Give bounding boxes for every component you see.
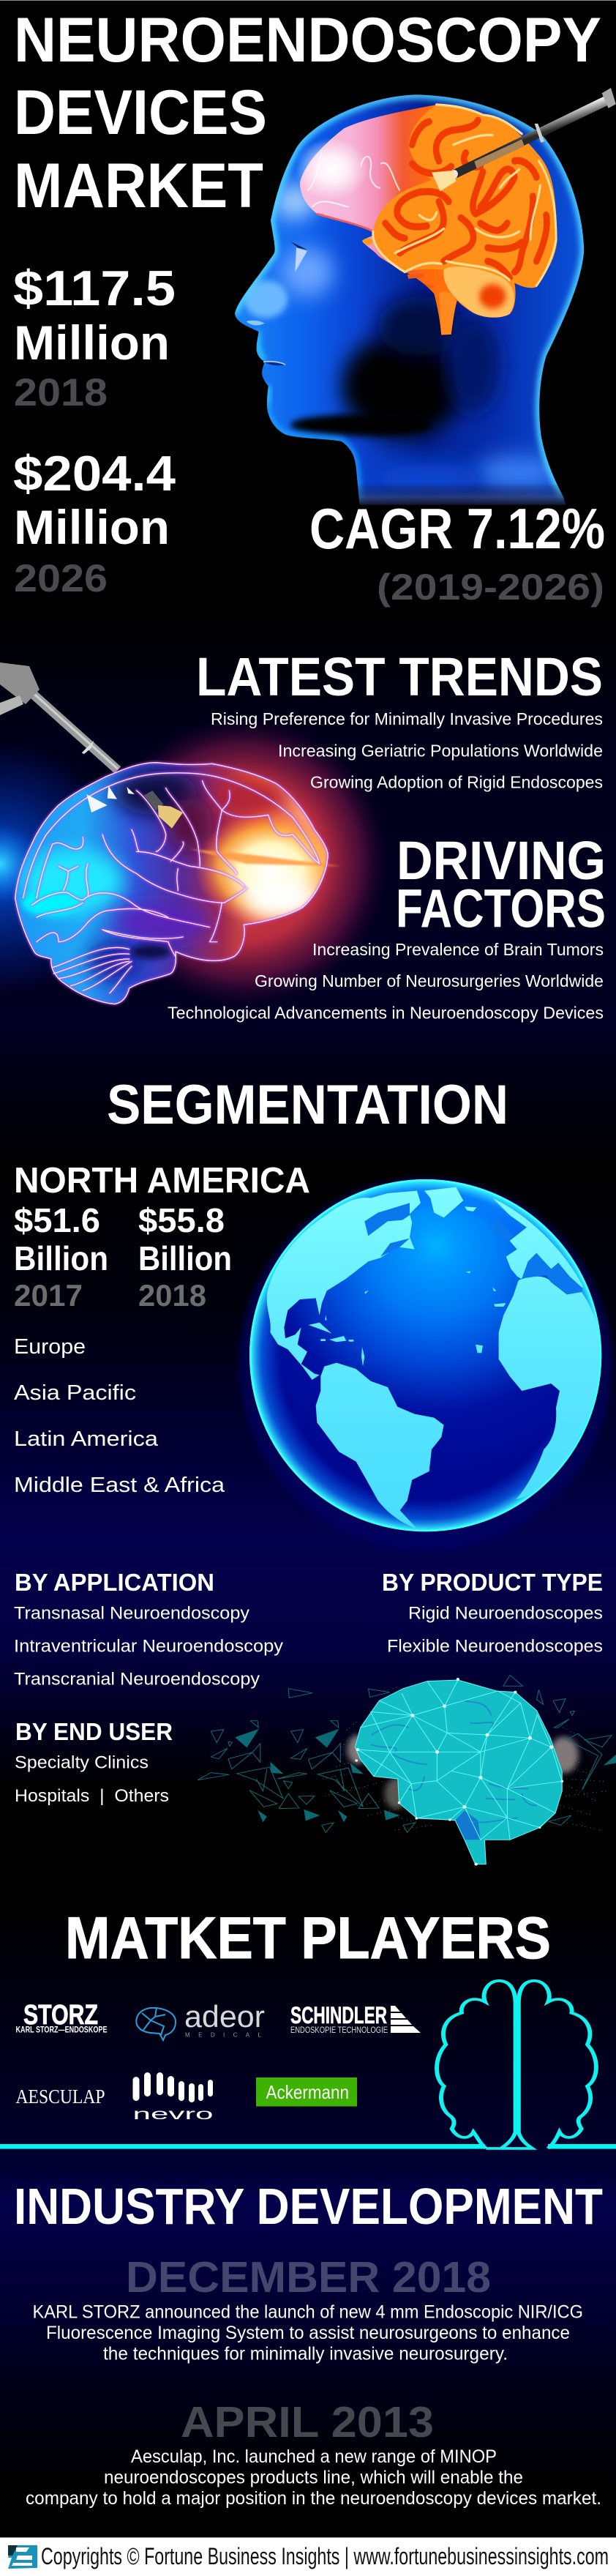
brain creases: [371, 1700, 537, 1822]
gyri highlights: [373, 105, 556, 285]
heading: market players: MATKET PLAYERS: [65, 1905, 551, 1971]
CAGR figure: [309, 496, 605, 608]
panel: latest trends: Increasing Geriatric Populations Worldwide: [278, 741, 603, 760]
footer: [0, 2537, 616, 2576]
stat: 2018 market value: 2018: [14, 371, 108, 414]
stat: 2018 market value: $117.5: [13, 261, 176, 316]
logo: adeor medical: [136, 1999, 265, 2040]
brain stem: [439, 291, 457, 335]
brain veins: [15, 763, 328, 1004]
stat: 2026 market value: 2026: [14, 557, 108, 600]
continents: [267, 1187, 602, 1528]
stat: 2026 market value: Million: [14, 500, 170, 554]
CAGR figure: (2019-2026): [377, 567, 604, 608]
panel: by end user: [15, 1718, 173, 1806]
stat: 2026 market value: [13, 446, 176, 600]
logo: Ackermann: Ackermann: [266, 2081, 349, 2103]
logo: nevro: nevro: [133, 2106, 214, 2123]
particles: [323, 1686, 606, 1830]
panel: north america: [14, 1161, 310, 1313]
panel: April 2013 development: APRIL 2013: [181, 2398, 434, 2446]
brain sulci: [386, 120, 546, 277]
logo: Ackermann: [256, 2077, 357, 2107]
face details: [290, 242, 307, 250]
panel: by application: [14, 1569, 283, 1690]
panel: December 2018 development: the techniques for minimally invasive neurosurgery.: [103, 2344, 508, 2364]
panel: driving factors: [168, 830, 606, 1022]
title: [14, 5, 601, 221]
panel: latest trends: [196, 646, 603, 792]
divider line with brain outline icon: [0, 1981, 616, 2149]
icon: brain outline: [437, 1981, 596, 2148]
top edge line: [0, 0, 616, 1]
title: DEVICES: [14, 78, 267, 148]
panel: by product type: Rigid Neuroendoscopes: [408, 1603, 603, 1624]
instrument tip: [144, 791, 163, 810]
panel: by product type: Flexible Neuroendoscopes: [387, 1637, 603, 1656]
logo: adeor medical: MEDICAL: [185, 2032, 262, 2038]
panel: driving factors: Technological Advancements in Neuroendoscopy Devices: [168, 1003, 604, 1022]
illustration: polygon mesh brain: [198, 1675, 616, 1866]
panel: by end user: Specialty Clinics: [15, 1752, 149, 1773]
panel: driving factors: Increasing Prevalence of Brain Tumors: [312, 940, 604, 959]
panel: April 2013 development: Aesculap, Inc. launched a new range of MINOP: [131, 2446, 497, 2467]
list: other regions: Middle East & Africa: [14, 1474, 225, 1497]
logo: Schindler: SCHINDLER: [290, 2002, 387, 2028]
panel: by end user: BY END USER: [15, 1718, 173, 1745]
logo: nevro: [133, 2072, 214, 2123]
inland waters: [364, 1203, 583, 1294]
pink lobe folds: [307, 153, 400, 207]
panel: December 2018 development: DECEMBER 2018: [126, 2253, 491, 2301]
stat: 2026 market value: $204.4: [13, 446, 176, 501]
icon: nevro bars: [133, 2072, 213, 2102]
panel: north america: 2017: [14, 1278, 83, 1313]
panel: by application: BY APPLICATION: [15, 1569, 214, 1596]
panel: north america: NORTH AMERICA: [14, 1161, 310, 1201]
panel: driving factors: DRIVING: [397, 830, 606, 891]
shading inside head: [342, 335, 463, 437]
glows behind brain: [347, 1735, 579, 1810]
list: other regions: [14, 1335, 225, 1497]
stat: 2018 market value: [13, 261, 176, 414]
panel: December 2018 development: KARL STORZ announced the launch of new 4 mm Endoscopic NIR/ICG: [32, 2301, 583, 2322]
globe rim light: [249, 1179, 601, 1531]
globe edge: [250, 1180, 601, 1531]
logo: Karl Storz: KARL STORZ—ENDOSKOPE: [16, 2025, 107, 2035]
panel: by product type: [382, 1569, 603, 1656]
instrument: [0, 662, 118, 770]
panel: north america: Billion: [14, 1239, 108, 1277]
stat: 2018 market value: Million: [14, 316, 170, 370]
orange lobes: [373, 105, 557, 288]
icon: Fortune Business Insights logo: [8, 2545, 37, 2569]
panel: north america: 2018: [138, 1278, 206, 1313]
icon: striped pyramid: [391, 2006, 421, 2033]
logo: Aesculap: AESCULAP: [16, 2086, 105, 2108]
ocean: [250, 1180, 601, 1531]
panel: by end user: Hospitals | Others: [15, 1786, 169, 1806]
brain body: [355, 1680, 562, 1864]
panel: north america: $51.6: [14, 1201, 100, 1239]
list: other regions: Latin America: [14, 1427, 159, 1451]
rim light: [235, 94, 584, 497]
logo: Schindler: ENDOSKOPIE TECHNOLOGIE: [290, 2025, 388, 2035]
globe outer glow: [239, 1177, 612, 1550]
list: other regions: Europe: [14, 1335, 86, 1359]
scattered triangles: [198, 1675, 612, 1832]
mesh nodes: [355, 1678, 563, 1866]
panel: December 2018 development: Fluorescence Imaging System to assist neurosurgeons to enhance: [46, 2323, 570, 2343]
illustration: blue head with orange brain and endoscope: [234, 88, 616, 512]
panel: December 2018 development: [32, 2253, 583, 2364]
brain background glow: [0, 710, 395, 1025]
temporal lobe: [443, 266, 514, 318]
endoscope shaft: [454, 96, 609, 178]
panel: by product type: BY PRODUCT TYPE: [382, 1569, 603, 1596]
list: other regions: Asia Pacific: [14, 1381, 136, 1405]
panel: latest trends: Rising Preference for Minimally Invasive Procedures: [211, 709, 603, 728]
brain body: [15, 763, 328, 1004]
panel: driving factors: Growing Number of Neurosurgeries Worldwide: [255, 971, 604, 990]
heading: segmentation: SEGMENTATION: [107, 1074, 508, 1136]
illustration: globe: [239, 1177, 612, 1550]
head silhouette: [235, 94, 584, 505]
panel: by application: Intraventricular Neuroendoscopy: [14, 1637, 283, 1656]
logo: adeor medical: adeor: [184, 1999, 265, 2034]
panel: April 2013 development: company to hold a major position in the neuroendoscopy devices market.: [26, 2488, 601, 2509]
brain: [300, 105, 557, 335]
icon: adeor brain: [136, 2008, 176, 2040]
panel: north america: $55.8: [138, 1201, 225, 1239]
title: MARKET: [14, 151, 263, 221]
panel: north america: Billion: [138, 1239, 232, 1277]
panel: April 2013 development: [26, 2398, 601, 2509]
mesh: [355, 1680, 562, 1864]
illustration: glowing brain with instrument: [0, 662, 395, 1025]
panel: April 2013 development: neuroendoscopes products line, which will enable the: [104, 2467, 523, 2487]
panel: by application: Transcranial Neuroendoscopy: [14, 1669, 260, 1690]
panel: by application: Transnasal Neuroendoscopy: [14, 1603, 249, 1624]
logo: Karl Storz: STORZ: [23, 2000, 98, 2031]
panel: latest trends: Growing Adoption of Rigid Endoscopes: [310, 773, 603, 792]
